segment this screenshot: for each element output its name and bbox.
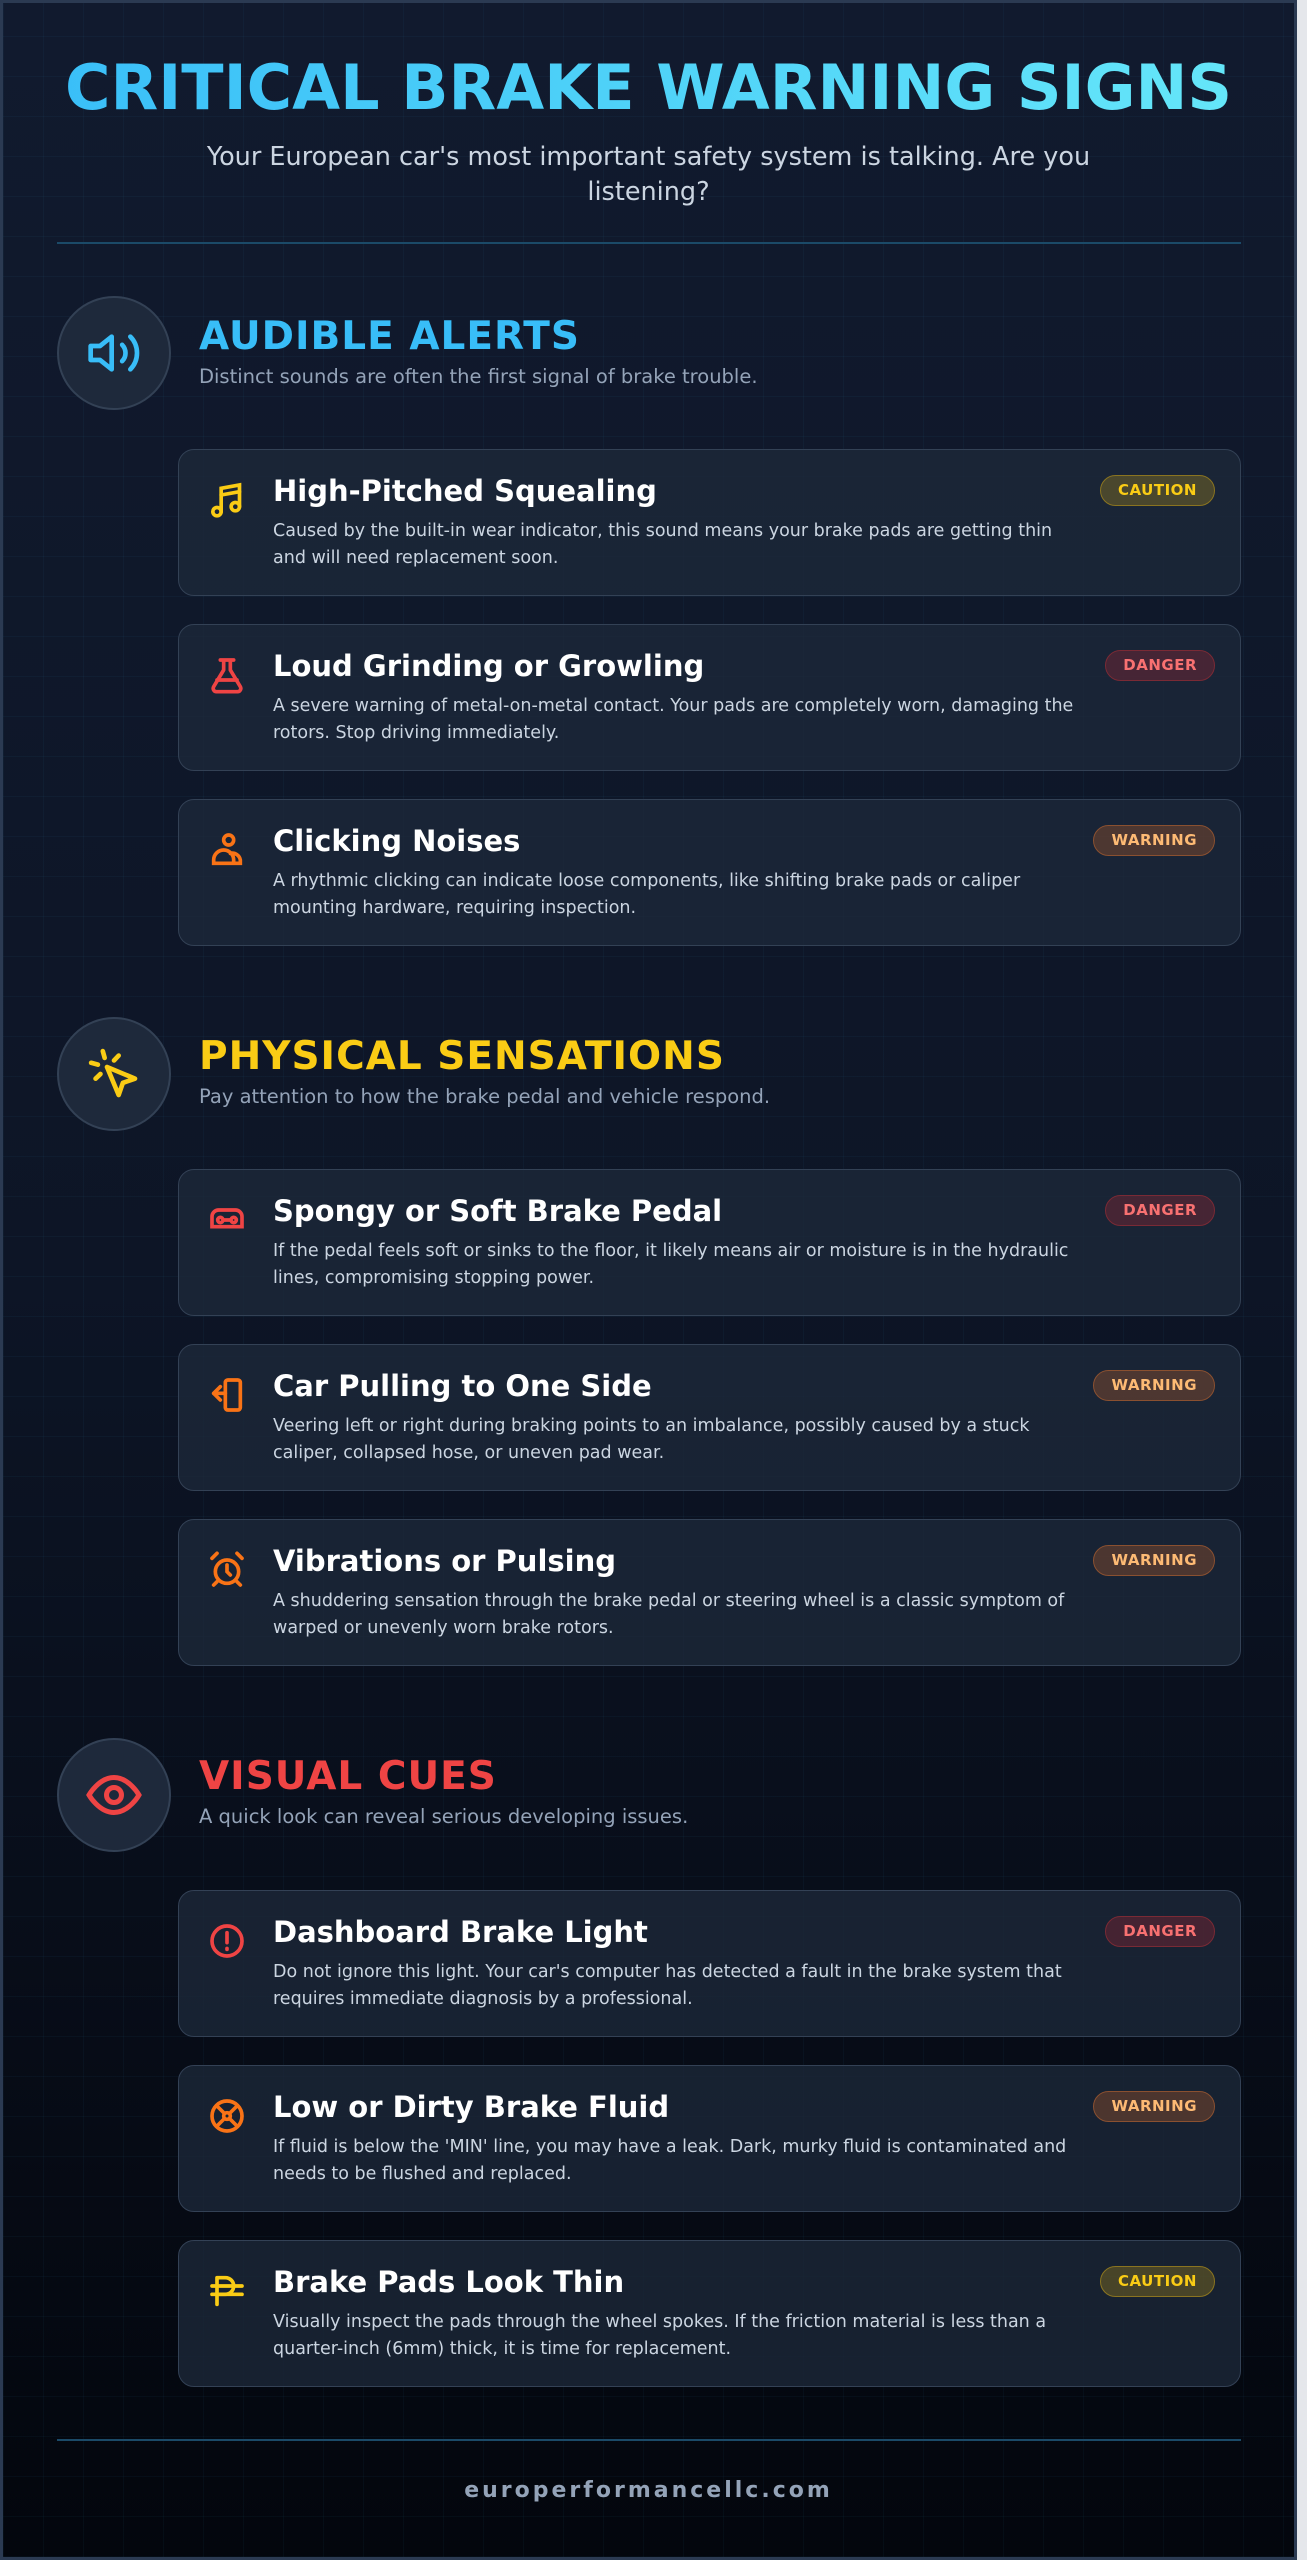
card: vibrations <box>178 1519 1241 1666</box>
subtitle: Your European car's most important safety system is talking. Are you listening? <box>207 142 1090 207</box>
heading: visual cues: VISUAL CUES <box>199 1754 497 1799</box>
badge: WARNING <box>1111 1376 1197 1394</box>
badge <box>1100 2266 1215 2297</box>
card: squealing <box>178 449 1241 596</box>
card: clicking: A rhythmic clicking can indicate loose components, like shifting brake pads or caliper mounting hardware, requiring inspection. <box>273 871 1020 918</box>
card: pads thin <box>178 2240 1241 2387</box>
card: brake fluid <box>178 2065 1241 2212</box>
icon: alert circle <box>210 1924 244 1958</box>
card: spongy pedal <box>178 1169 1241 1316</box>
badge: DANGER <box>1123 1201 1197 1219</box>
badge <box>1105 650 1215 681</box>
card: grinding <box>178 624 1241 771</box>
icon: pads <box>210 2276 244 2306</box>
badge <box>1093 2091 1215 2122</box>
card: pulling <box>178 1344 1241 1491</box>
icon: alarm clock <box>210 1551 244 1587</box>
card: dashboard light <box>178 1890 1241 2037</box>
card: grinding: A severe warning of metal-on-metal contact. Your pads are completely worn, damaging the rotors. Stop driving immediately. <box>273 696 1073 743</box>
card: vibrations: Vibrations or Pulsing <box>273 1544 616 1578</box>
card: vibrations: A shuddering sensation through the brake pedal or steering wheel is a classic symptom of warped or unevenly worn brake rotors. <box>273 1591 1064 1638</box>
badge: WARNING <box>1111 831 1197 849</box>
section subtitle: Distinct sounds are often the first signal of brake trouble. <box>199 365 758 388</box>
card: pulling: Veering left or right during braking points to an imbalance, possibly caused by a stuck caliper, collapsed hose, or uneven pad wear. <box>273 1416 1030 1463</box>
card: brake fluid: If fluid is below the 'MIN' line, you may have a leak. Dark, murky fluid is contaminated and needs to be flushed and replaced. <box>273 2137 1066 2184</box>
card: spongy pedal: If the pedal feels soft or sinks to the floor, it likely means air or moisture is in the hydraulic lines, compromising stopping power. <box>273 1241 1068 1288</box>
icon: music note <box>211 482 242 518</box>
card: squealing: Caused by the built-in wear indicator, this sound means your brake pads are getting thin and will need replacement soon. <box>273 521 1052 568</box>
badge: DANGER <box>1123 656 1197 674</box>
icon: eye section <box>57 1738 171 1852</box>
section subtitle: Pay attention to how the brake pedal and vehicle respond. <box>199 1085 770 1108</box>
title: CRITICAL BRAKE WARNING SIGNS <box>65 51 1232 124</box>
badge <box>1093 825 1215 856</box>
card: pulling: Car Pulling to One Side <box>273 1369 652 1403</box>
icon: cursor click section <box>57 1017 171 1131</box>
card: grinding: Loud Grinding or Growling <box>273 649 704 683</box>
icon: wheel <box>210 2099 244 2133</box>
heading: audible alerts: AUDIBLE ALERTS <box>199 314 580 359</box>
icon: speaker section <box>57 296 171 410</box>
card: clicking <box>178 799 1241 946</box>
badge: CAUTION <box>1118 2272 1197 2290</box>
icon: pedal <box>210 1208 244 1228</box>
badge: CAUTION <box>1118 481 1197 499</box>
badge <box>1105 1195 1215 1226</box>
badge <box>1093 1370 1215 1401</box>
footer: europerformancellc.com <box>464 2478 833 2503</box>
card: pads thin: Visually inspect the pads through the wheel spokes. If the friction material is less than a quarter-inch (6mm) thick, it is time for replacement. <box>273 2312 1046 2359</box>
card: dashboard light: Do not ignore this light. Your car's computer has detected a fault in the brake system that requires immediate diagnosis by a professional. <box>273 1962 1062 2009</box>
badge <box>1100 475 1215 506</box>
icon: person <box>212 833 242 866</box>
card: dashboard light: Dashboard Brake Light <box>273 1915 648 1949</box>
section subtitle: A quick look can reveal serious developing issues. <box>199 1805 688 1828</box>
card: pads thin: Brake Pads Look Thin <box>273 2265 624 2299</box>
card: spongy pedal: Spongy or Soft Brake Pedal <box>273 1194 722 1228</box>
heading: physical sensations: PHYSICAL SENSATIONS <box>199 1034 725 1079</box>
icon: direction <box>212 1378 242 1412</box>
card: squealing: High-Pitched Squealing <box>273 474 657 508</box>
badge: DANGER <box>1123 1922 1197 1940</box>
badge <box>1093 1545 1215 1576</box>
badge: WARNING <box>1111 1551 1197 1569</box>
badge <box>1105 1916 1215 1947</box>
card: clicking: Clicking Noises <box>273 824 520 858</box>
icon: flask <box>211 658 243 694</box>
badge: WARNING <box>1111 2097 1197 2115</box>
card: brake fluid: Low or Dirty Brake Fluid <box>273 2090 669 2124</box>
